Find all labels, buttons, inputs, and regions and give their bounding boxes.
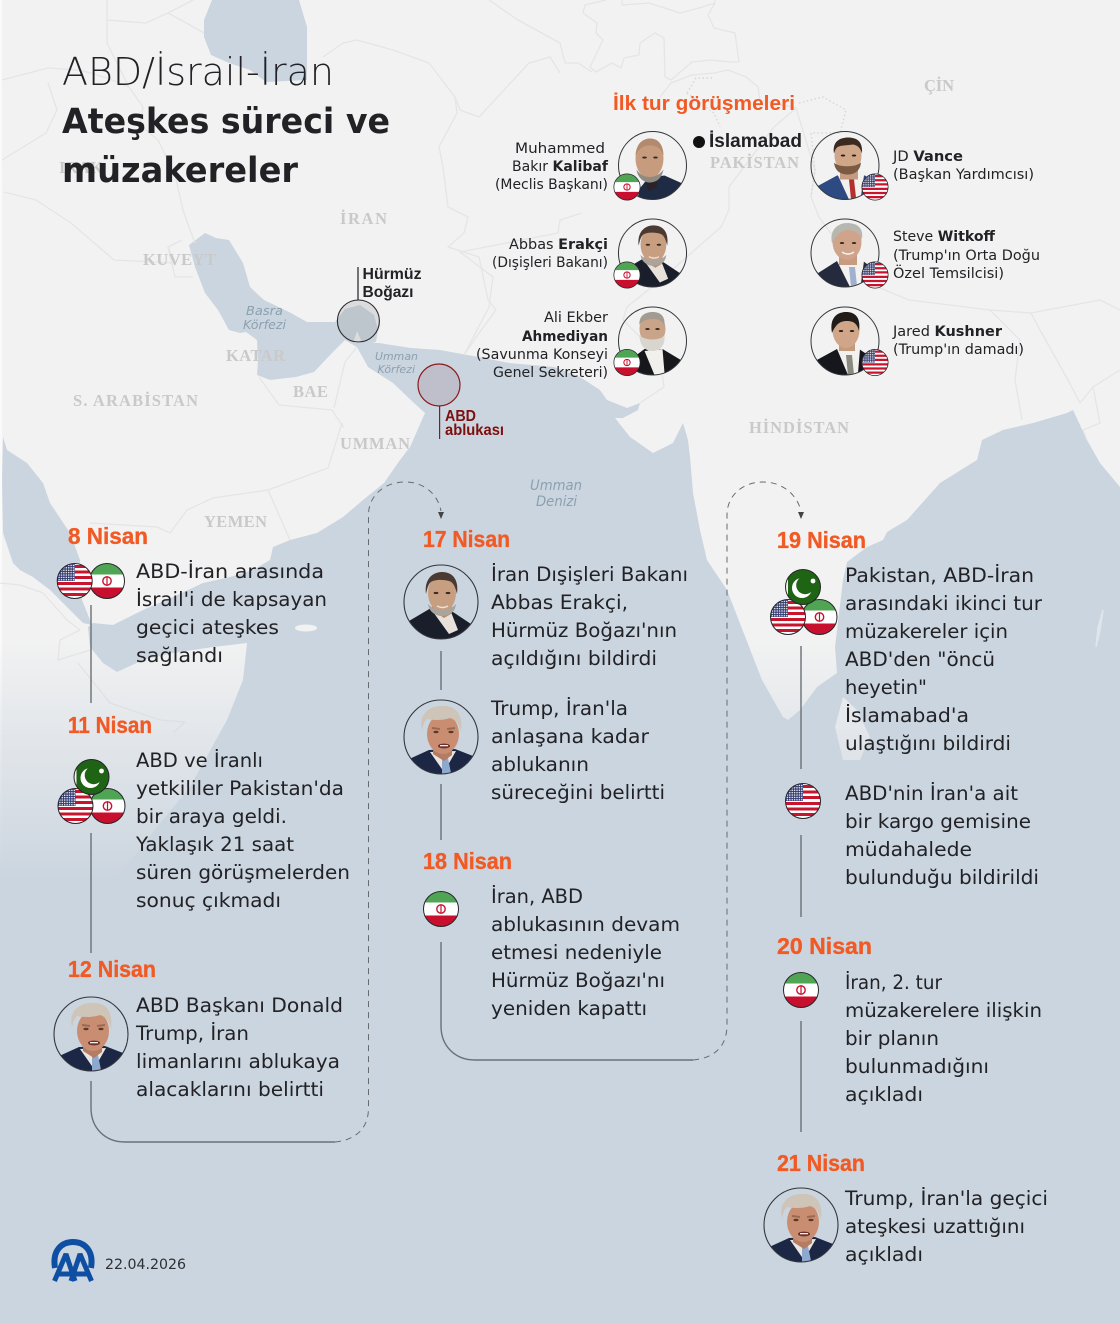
event text: 11 Nisan: yetkililer Pakistan'da xyxy=(136,777,344,800)
name: Vance: (Başkan Yardımcısı) xyxy=(893,167,1034,183)
event text: 19 Nisan Pakistan: müzakereler için xyxy=(845,620,1008,643)
name: Kalibaf xyxy=(495,141,609,193)
event text: 18 Nisan: Hürmüz Boğazı'nı xyxy=(491,969,665,992)
delegate: Witkoff xyxy=(811,219,1040,289)
name: Ahmediyan: Ahmediyan xyxy=(522,329,608,345)
event text: 20 Nisan xyxy=(845,971,1042,1106)
connector: column 1 to column 2 xyxy=(335,482,444,1142)
event text: 21 Nisan: Trump, İran'la geçici xyxy=(844,1187,1048,1210)
map labels: S. ARABİSTAN xyxy=(73,391,198,410)
flag: USA xyxy=(785,783,821,819)
name: Vance: JD Vance xyxy=(892,149,963,165)
map labels: Umman xyxy=(375,350,418,363)
name: Witkoff: Steve Witkoff xyxy=(893,229,995,245)
map labels: IRAK xyxy=(59,158,103,177)
portrait: Kushner xyxy=(811,307,879,377)
Andaman Islands xyxy=(1096,610,1103,647)
Strait of Hormuz water xyxy=(335,305,378,347)
event text: 11 Nisan: ABD ve İranlı xyxy=(136,749,263,772)
name: Kushner xyxy=(892,324,1024,358)
event text: 17 Nisan Erakçi: Hürmüz Boğazı'nın xyxy=(491,619,677,642)
event text: 17 Nisan Erakçi: açıldığını bildirdi xyxy=(491,647,657,670)
portrait: Erakçi xyxy=(618,219,687,288)
name: Ahmediyan: Ali Ekber xyxy=(544,310,608,326)
Indian Ocean and Arabian Sea xyxy=(0,340,1120,1324)
Red Sea xyxy=(2,437,92,625)
event text: 12 Nisan xyxy=(135,994,343,1101)
name: Witkoff xyxy=(893,229,1040,282)
event text: 8 Nisan xyxy=(136,560,327,667)
event text: 12 Nisan: limanlarını ablukaya xyxy=(136,1050,340,1073)
event text: 12 Nisan: ABD Başkanı Donald xyxy=(136,994,343,1017)
portrait: Kalibaf xyxy=(618,132,686,202)
event text: 19 Nisan Pakistan: heyetin" xyxy=(845,676,927,699)
event text: 17 Nisan Trump: Trump, İran'la xyxy=(490,697,628,720)
flag: Iran xyxy=(783,972,819,1008)
event text: 18 Nisan: İran, ABD xyxy=(491,885,583,908)
name: Kalibaf: Muhammed xyxy=(515,141,605,157)
event text: 20 Nisan: açıkladı xyxy=(845,1083,923,1106)
map labels xyxy=(59,76,954,531)
date: 19 Nisan: 19 Nisan xyxy=(777,527,866,553)
name: Witkoff: Özel Temsilcisi) xyxy=(893,264,1004,282)
portrait: Trump xyxy=(764,1188,838,1263)
map labels: Körfezi xyxy=(378,363,415,376)
map labels: KUVEYT xyxy=(143,250,216,269)
flag: USA xyxy=(862,174,888,200)
map labels: HİNDİSTAN xyxy=(749,418,849,437)
event text: 17 Nisan Trump: süreceğini belirtti xyxy=(491,781,665,804)
name: Vance xyxy=(892,149,1034,183)
event text: 21 Nisan: açıkladı xyxy=(845,1243,923,1266)
event text: 11 Nisan xyxy=(135,749,350,912)
marker: US blockade: ABD xyxy=(445,408,476,425)
name: Kushner: Jared Kushner xyxy=(892,324,1003,340)
timeline column 3 xyxy=(764,527,1048,1266)
event text: 19 Nisan ABD: ABD'nin İran'a ait xyxy=(845,782,1018,805)
event text: 11 Nisan: Yaklaşık 21 saat xyxy=(135,833,294,856)
name: Kushner: (Trump'ın damadı) xyxy=(893,342,1024,358)
bottom solid sea xyxy=(0,880,1120,1324)
map labels: Basra xyxy=(246,304,283,318)
title xyxy=(62,50,390,191)
bottom fade xyxy=(0,640,1120,880)
event text: 11 Nisan: bir araya geldi. xyxy=(136,805,287,828)
marker: Islamabad: İslamabad xyxy=(709,131,802,152)
connector: column 2 to column 3 xyxy=(693,482,804,1060)
event text: 19 Nisan ABD: müdahalede xyxy=(845,838,972,861)
Musandam peninsula xyxy=(353,331,361,346)
name: Erakçi xyxy=(492,237,608,271)
event text: 20 Nisan: bir planın xyxy=(845,1027,939,1050)
date: 17 Nisan: 17 Nisan xyxy=(423,526,510,552)
date: 11 Nisan: 11 Nisan xyxy=(68,712,152,738)
map labels: Körfezi xyxy=(243,318,287,332)
flag: USA xyxy=(862,262,888,288)
name: Kalibaf: (Meclis Başkanı) xyxy=(495,177,608,193)
map labels: YEMEN xyxy=(204,512,267,531)
map labels: ÇİN xyxy=(924,76,954,95)
country borders xyxy=(0,0,1120,733)
date: 21 Nisan: 21 Nisan xyxy=(777,1150,865,1176)
date: 20 Nisan: 20 Nisan xyxy=(777,933,872,959)
event text: 17 Nisan Erakçi xyxy=(491,563,688,670)
date: 8 Nisan: 8 Nisan xyxy=(68,523,148,549)
event text: 20 Nisan: İran, 2. tur xyxy=(845,971,943,994)
portrait: Vance xyxy=(811,132,879,202)
portrait: Witkoff xyxy=(811,219,879,289)
map labels: UMMAN xyxy=(340,434,410,453)
event text: 17 Nisan Erakçi: Abbas Erakçi, xyxy=(491,591,628,614)
title: müzakereler xyxy=(62,151,299,191)
date stamp: 22.04.2026 xyxy=(105,1257,186,1273)
name: Erakçi: (Dışişleri Bakanı) xyxy=(492,255,608,271)
event text: 8 Nisan: sağlandı xyxy=(136,644,223,667)
title: Ateşkes süreci ve xyxy=(62,102,390,142)
event text: 18 Nisan: etmesi nedeniyle xyxy=(491,941,662,964)
event text: 21 Nisan: ateşkesi uzattığını xyxy=(845,1215,1025,1238)
date: 12 Nisan: 12 Nisan xyxy=(68,956,156,982)
delegate: Erakçi xyxy=(492,219,687,289)
event text: 19 Nisan Pakistan xyxy=(845,564,1043,755)
event text: 17 Nisan Trump: ablukanın xyxy=(491,753,589,776)
event text: 18 Nisan: ablukasının devam xyxy=(491,913,680,936)
event text: 8 Nisan: İsrail'i de kapsayan xyxy=(136,588,327,611)
flags: Pakistan, USA, Iran xyxy=(58,759,126,824)
event text: 19 Nisan Pakistan: Pakistan, ABD-İran xyxy=(845,564,1034,587)
marker: US blockade xyxy=(418,364,504,439)
map labels: Umman xyxy=(530,478,582,494)
flag: Iran xyxy=(614,174,640,201)
Persian Gulf xyxy=(189,233,352,380)
flags: USA and Iran xyxy=(57,563,125,600)
first round heading: İlk tur görüşmeleri xyxy=(613,92,795,115)
name: Witkoff: (Trump'ın Orta Doğu xyxy=(893,248,1040,264)
portrait: Ahmediyan xyxy=(618,307,686,377)
Sri Lanka xyxy=(835,697,870,760)
Caspian Sea xyxy=(204,0,307,82)
portrait: Trump xyxy=(54,997,128,1072)
name: Ahmediyan: (Savunma Konseyi xyxy=(476,347,608,363)
flag: USA xyxy=(862,349,888,376)
event text: 18 Nisan: yeniden kapattı xyxy=(491,997,647,1020)
date: 18 Nisan: 18 Nisan xyxy=(423,848,512,874)
event text: 8 Nisan: ABD-İran arasında xyxy=(136,560,324,583)
event text: 8 Nisan: geçici ateşkes xyxy=(136,616,279,639)
event text: 19 Nisan Pakistan: ulaştığını bildirdi xyxy=(845,732,1011,755)
event text: 12 Nisan: alacaklarını belirtti xyxy=(136,1078,324,1101)
event text: 19 Nisan ABD xyxy=(845,782,1039,889)
map labels: İRAN xyxy=(340,209,387,228)
marker: Strait of Hormuz: Hürmüz xyxy=(362,266,422,283)
event text: 19 Nisan ABD: bir kargo gemisine xyxy=(845,810,1031,833)
name: Ahmediyan xyxy=(476,310,608,381)
name: Ahmediyan: Genel Sekreteri) xyxy=(493,365,608,381)
logo: Anadolu Agency xyxy=(54,1242,92,1281)
event text: 19 Nisan ABD: bulunduğu bildirildi xyxy=(845,866,1039,889)
event text: 20 Nisan: müzakerelere ilişkin xyxy=(845,999,1042,1022)
flag: Iran xyxy=(423,891,459,928)
event text: 17 Nisan Trump xyxy=(490,697,665,804)
portrait: Trump xyxy=(404,700,478,775)
marker: Strait of Hormuz: Boğazı xyxy=(362,284,414,301)
event text: 12 Nisan: Trump, İran xyxy=(135,1022,249,1045)
event text: 20 Nisan: bulunmadığını xyxy=(845,1055,989,1078)
timeline column 1 xyxy=(54,523,350,1142)
timeline column 2 xyxy=(404,526,693,1060)
event text: 19 Nisan Pakistan: arasındaki ikinci tur xyxy=(845,592,1043,615)
event text: 19 Nisan Pakistan: ABD'den "öncü xyxy=(845,648,995,671)
marker: Strait of Hormuz xyxy=(337,266,422,342)
map labels: KATAR xyxy=(226,346,286,365)
event text: 19 Nisan Pakistan: İslamabad'a xyxy=(845,704,969,727)
marker: US blockade: ablukası xyxy=(445,422,504,439)
portrait: Erakçi xyxy=(404,565,478,640)
flag: Iran xyxy=(614,262,640,289)
event text: 17 Nisan Trump: anlaşana kadar xyxy=(491,725,650,748)
event text: 21 Nisan xyxy=(844,1187,1048,1266)
name: Erakçi: Abbas Erakçi xyxy=(509,237,608,253)
event text: 11 Nisan: süren görüşmelerden xyxy=(136,861,350,884)
name: Kalibaf: Bakır Kalibaf xyxy=(512,159,609,175)
event text: 11 Nisan: sonuç çıkmadı xyxy=(136,889,281,912)
map labels: PAKİSTAN xyxy=(710,153,799,172)
title: ABD/İsrail-İran xyxy=(62,50,334,94)
flag: Iran xyxy=(614,349,640,376)
delegate: Kushner xyxy=(811,307,1024,377)
event text: 18 Nisan xyxy=(491,885,680,1020)
delegate: Kalibaf xyxy=(495,132,686,202)
delegate: Ahmediyan xyxy=(476,307,686,381)
map labels: BAE xyxy=(293,382,328,401)
delegate: Vance xyxy=(811,132,1034,202)
map labels: Denizi xyxy=(536,494,577,510)
flags: Pakistan, USA, Iran xyxy=(770,569,838,636)
Socotra xyxy=(295,624,317,632)
event text: 17 Nisan Erakçi: İran Dışişleri Bakanı xyxy=(491,563,688,586)
